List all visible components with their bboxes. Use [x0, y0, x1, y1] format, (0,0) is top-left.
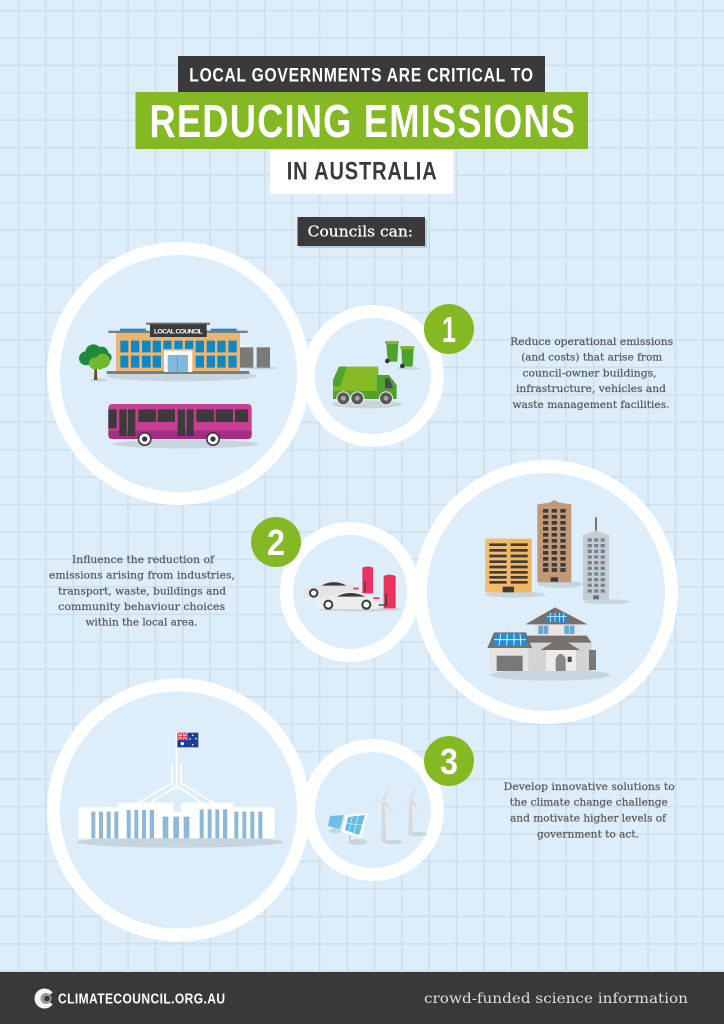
- icon: grey skyscraper: [583, 517, 631, 604]
- text block: action 3: [504, 781, 675, 841]
- text block: action 3: and motivate higher levels of: [510, 813, 667, 825]
- icon: bus: [108, 404, 259, 448]
- title line 3: [270, 150, 454, 194]
- icon: electric cars and chargers: [303, 566, 402, 611]
- text block: action 3: the climate change challenge: [510, 797, 668, 809]
- panel: action 2 circles: [280, 460, 678, 724]
- text block: action 3: Develop innovative solutions to: [504, 781, 675, 793]
- text block: action 2: within the local area.: [86, 617, 198, 629]
- title line 3: IN AUSTRALIA: [287, 158, 437, 185]
- badge: number 2: 2: [267, 522, 285, 563]
- icon: brown tower: [537, 500, 583, 588]
- subheading: councils can: Councils can:: [308, 225, 413, 241]
- text block: action 2: community behaviour choices: [58, 601, 225, 613]
- text block: action 2: transport, waste, buildings and: [58, 586, 226, 598]
- icon: australian flag: [177, 733, 198, 747]
- icon: tree: [79, 344, 112, 382]
- text block: action 3: government to act.: [537, 829, 639, 841]
- footer: [0, 972, 724, 1024]
- badge: number 3: [424, 736, 474, 786]
- badge: number 2: [251, 517, 301, 567]
- icon: local council building: [107, 323, 277, 381]
- text block: action 2: Influence the reduction of: [72, 554, 215, 566]
- footer tagline: crowd-funded science information: [424, 991, 688, 1007]
- text block: action 1: [510, 336, 673, 411]
- badge: number 1: 1: [442, 309, 456, 350]
- icon: local council building: LOCAL COUNCIL: [154, 328, 203, 335]
- icon: climate council logo: [34, 988, 55, 1008]
- icon: yellow office building: [485, 539, 545, 598]
- badge: number 1: [424, 304, 474, 354]
- title line 1: LOCAL GOVERNMENTS ARE CRITICAL TO: [189, 64, 533, 86]
- subheading: councils can: [298, 217, 427, 248]
- title line 2: REDUCING EMISSIONS: [150, 95, 575, 147]
- text block: action 1: (and costs) that arise from: [521, 352, 662, 364]
- panel: action 1 circles: [47, 242, 444, 505]
- icon: parliament house: [77, 733, 283, 848]
- icon: solar panels and wind turbines: [328, 783, 427, 845]
- title: [136, 56, 588, 194]
- badge: number 3: 3: [440, 741, 458, 782]
- text block: action 2: emissions arising from industries,: [49, 570, 235, 582]
- text block: action 1: waste management facilities.: [512, 399, 670, 411]
- text block: action 1: council-owner buildings,: [522, 368, 656, 380]
- text block: action 1: Reduce operational emissions: [510, 336, 673, 348]
- icon: house with solar panels: [487, 607, 610, 681]
- footer url: CLIMATECOUNCIL.ORG.AU: [58, 990, 225, 1007]
- text block: action 1: infrastructure, vehicles and: [516, 383, 666, 395]
- title line 1: [178, 56, 545, 92]
- text block: action 2: [49, 554, 235, 629]
- panel: action 3 circles: [47, 678, 444, 942]
- icon: garbage truck and bins: [332, 341, 420, 408]
